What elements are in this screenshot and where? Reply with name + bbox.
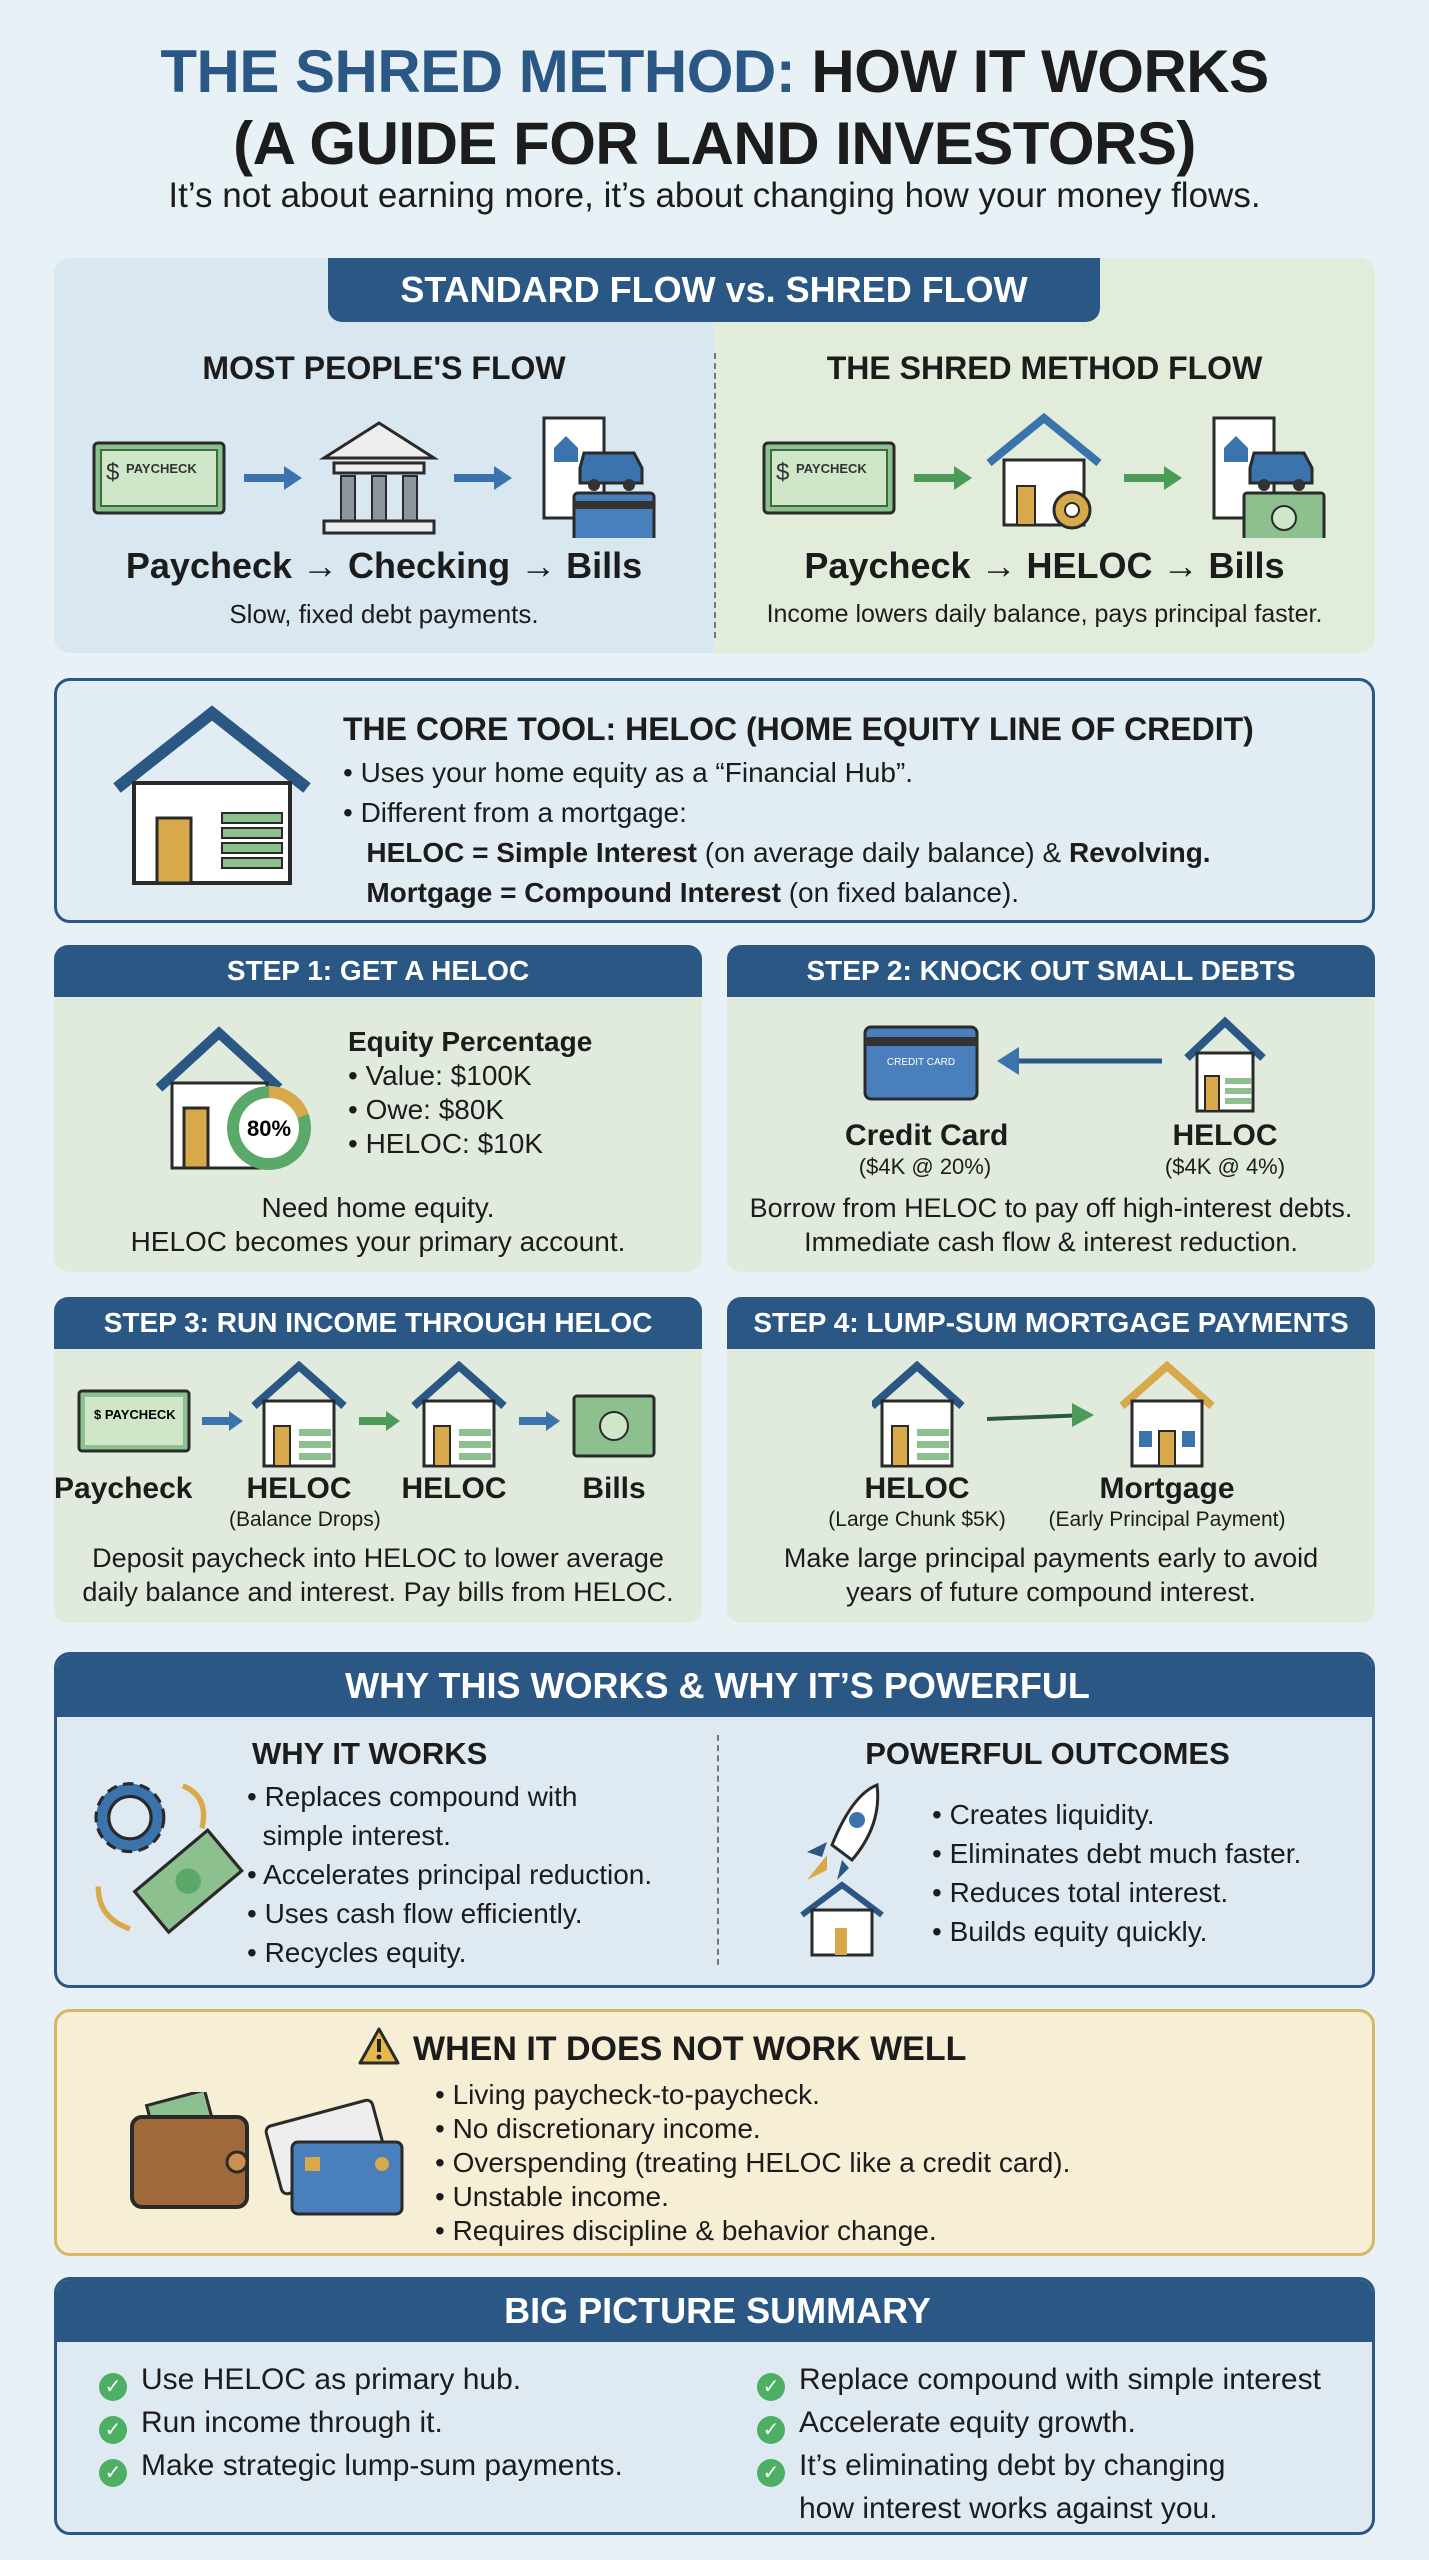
left caption: Slow, fixed debt payments.	[229, 599, 539, 629]
heading tab	[328, 258, 1100, 322]
left bullets: • Replaces compound with	[247, 1781, 577, 1812]
icon: house with 80%: 80%	[247, 1116, 291, 1141]
panel: step 3	[54, 1297, 702, 1623]
icons flow: $ PAYCHECK	[94, 1407, 176, 1422]
subtitle: It’s not about earning more, it’s about changing how your money flows.	[168, 176, 1261, 215]
left heading: WHY IT WORKS	[252, 1736, 487, 1771]
right bullets: • Eliminates debt much faster.	[932, 1838, 1301, 1869]
panel: step 4	[727, 1297, 1375, 1623]
right bullets	[932, 1799, 1301, 1947]
step 4 caption: years of future compound interest.	[846, 1577, 1256, 1607]
right caption: Income lowers daily balance, pays principal faster.	[767, 600, 1322, 628]
equity text	[348, 1026, 592, 1159]
step 4 caption: Make large principal payments early to avoid	[784, 1543, 1318, 1573]
right heading: POWERFUL OUTCOMES	[865, 1736, 1230, 1771]
icon: wallet & card	[130, 2092, 404, 2216]
left heading: MOST PEOPLE'S FLOW	[202, 350, 566, 386]
right checklist: how interest works against you.	[799, 2492, 1218, 2525]
step 1 caption: Need home equity.	[262, 1192, 494, 1223]
labels: ($4K @ 20%)	[859, 1154, 991, 1179]
right bullets: • Reduces total interest.	[932, 1877, 1228, 1908]
step 2 caption	[750, 1193, 1352, 1257]
core bullets: • Different from a mortgage:	[343, 797, 687, 828]
panel: step 1	[54, 945, 702, 1272]
step 3 caption: daily balance and interest. Pay bills from HELOC.	[82, 1577, 674, 1607]
step 2 caption: Borrow from HELOC to pay off high-interest debts.	[750, 1193, 1352, 1223]
left bullets	[247, 1781, 652, 1968]
step 2 caption: Immediate cash flow & interest reduction.	[804, 1227, 1298, 1257]
warning bullets: • Unstable income.	[435, 2181, 669, 2212]
labels: (Large Chunk $5K)	[828, 1508, 1006, 1531]
panel: why this works: WHY THIS WORKS & WHY IT’S POWERFUL	[345, 1665, 1090, 1706]
panel: big picture summary: BIG PICTURE SUMMARY	[504, 2290, 931, 2331]
icon: rocket & house	[800, 1782, 884, 1956]
left icons: $	[106, 459, 119, 486]
panel: big picture summary	[54, 2277, 1375, 2535]
panel: step 1: STEP 1: GET A HELOC	[227, 955, 529, 986]
panel: core tool	[54, 678, 1375, 923]
panel: why this works	[54, 1652, 1375, 1988]
right icons: PAYCHECK	[796, 461, 867, 476]
right checklist: ✓	[763, 2376, 779, 2398]
right checklist: It’s eliminating debt by changing	[799, 2449, 1225, 2482]
title: THE SHRED METHOD: HOW IT WORKS	[160, 38, 1269, 105]
left bullets: • Accelerates principal reduction.	[247, 1859, 652, 1890]
right checklist: ✓	[763, 2419, 779, 2441]
panel: standard vs shred flow	[54, 258, 1375, 653]
left icons	[92, 416, 656, 538]
panel: step 3: HELOC	[246, 1472, 352, 1505]
step 4 caption	[784, 1543, 1318, 1607]
icon: gear & money	[94, 1782, 244, 1934]
left checklist: Run income through it.	[141, 2406, 443, 2439]
warning bullets	[435, 2079, 1070, 2246]
icon: credit card, arrow, house	[864, 1016, 1266, 1112]
labels	[845, 1119, 1008, 1179]
labels: Paycheck	[54, 1472, 192, 1505]
equity text: • Owe: $80K	[348, 1094, 504, 1125]
left checklist: Use HELOC as primary hub.	[141, 2363, 521, 2396]
warning bullets: • Requires discipline & behavior change.	[435, 2215, 937, 2246]
step 3 caption	[82, 1543, 674, 1607]
left checklist: ✓	[105, 2376, 121, 2398]
labels: HELOC	[864, 1472, 970, 1505]
panel: step 3: STEP 3: RUN INCOME THROUGH HELOC	[104, 1307, 652, 1338]
step 1 caption: HELOC becomes your primary account.	[131, 1226, 625, 1257]
right icons: $	[776, 459, 789, 486]
title: (A GUIDE FOR LAND INVESTORS)	[233, 110, 1196, 177]
icons flow	[78, 1361, 656, 1468]
left checklist: Make strategic lump-sum payments.	[141, 2449, 623, 2482]
labels	[828, 1472, 1006, 1531]
panel: step 4: Mortgage	[1100, 1472, 1234, 1505]
panel: step 4: (Early Principal Payment)	[1049, 1508, 1285, 1531]
right checklist	[757, 2363, 1321, 2525]
left flow label: Paycheck → Checking → Bills	[126, 545, 642, 586]
right flow label: Paycheck → HELOC → Bills	[804, 545, 1285, 586]
left bullets: simple interest.	[263, 1820, 451, 1851]
panel: step 3: HELOC	[402, 1472, 506, 1505]
right checklist: ✓	[763, 2462, 779, 2484]
equity text: • HELOC: $10K	[348, 1128, 543, 1159]
step 1 caption	[131, 1192, 625, 1257]
core bullets: HELOC = Simple Interest (on average daily balance) & Revolving.	[366, 837, 1211, 868]
right checklist: Accelerate equity growth.	[799, 2406, 1136, 2439]
right icons	[762, 413, 1326, 538]
warning bullets: • No discretionary income.	[435, 2113, 761, 2144]
left checklist: ✓	[105, 2419, 121, 2441]
warning bullets: • Living paycheck-to-paycheck.	[435, 2079, 820, 2110]
right checklist: Replace compound with simple interest	[799, 2363, 1321, 2396]
labels: Credit Card	[845, 1119, 1008, 1152]
panel: when it does not work well	[54, 2009, 1375, 2256]
icons	[872, 1361, 1215, 1468]
icon: house	[113, 706, 311, 885]
warning bullets: • Overspending (treating HELOC like a credit card).	[435, 2147, 1070, 2178]
core heading: THE CORE TOOL: HELOC (HOME EQUITY LINE OF CREDIT)	[343, 711, 1254, 747]
panel: step 2	[727, 945, 1375, 1272]
left checklist	[99, 2363, 623, 2487]
core bullets: • Uses your home equity as a “Financial Hub”.	[343, 757, 913, 788]
icon: house with 80%	[156, 1026, 311, 1170]
heading tab: STANDARD FLOW vs. SHRED FLOW	[400, 269, 1028, 310]
left icons: PAYCHECK	[126, 461, 197, 476]
core bullets: Mortgage = Compound Interest (on fixed balance).	[366, 877, 1019, 908]
title	[160, 38, 1269, 177]
equity text: Equity Percentage	[348, 1026, 592, 1057]
panel: step 2: STEP 2: KNOCK OUT SMALL DEBTS	[806, 955, 1296, 986]
equity text: • Value: $100K	[348, 1060, 532, 1091]
panel: step 3: (Balance Drops)	[229, 1508, 381, 1531]
core bullets	[343, 757, 1211, 908]
panel: step 4: STEP 4: LUMP-SUM MORTGAGE PAYMENTS	[753, 1307, 1349, 1338]
right heading: THE SHRED METHOD FLOW	[827, 350, 1262, 386]
left bullets: • Recycles equity.	[247, 1937, 466, 1968]
left bullets: • Uses cash flow efficiently.	[247, 1898, 583, 1929]
panel: step 3: Bills	[582, 1472, 646, 1505]
warning heading: WHEN IT DOES NOT WORK WELL	[413, 2030, 966, 2068]
panel: step 2: HELOC	[1172, 1119, 1278, 1152]
right bullets: • Builds equity quickly.	[932, 1916, 1207, 1947]
panel: step 2: ($4K @ 4%)	[1165, 1154, 1285, 1179]
left checklist: ✓	[105, 2462, 121, 2484]
step 3 caption: Deposit paycheck into HELOC to lower average	[92, 1543, 664, 1573]
right bullets: • Creates liquidity.	[932, 1799, 1154, 1830]
icon: credit card, arrow, house: CREDIT CARD	[887, 1057, 955, 1068]
